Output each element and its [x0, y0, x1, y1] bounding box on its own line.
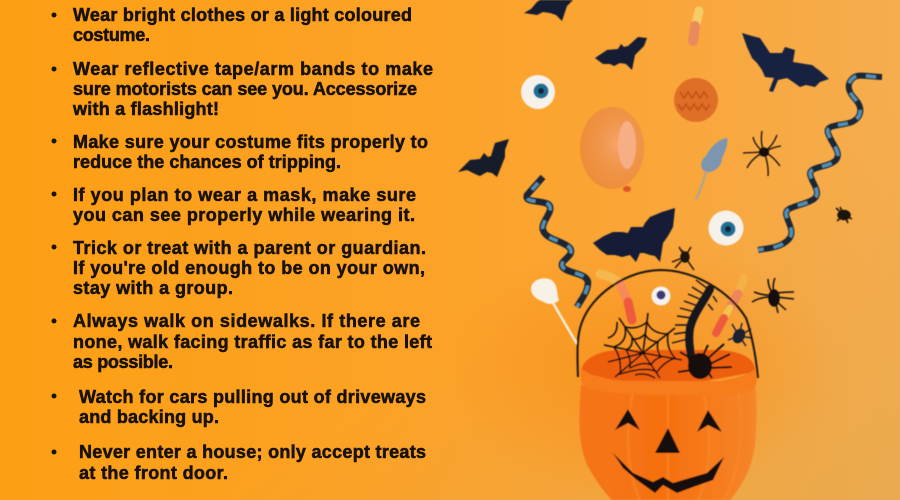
spider: far right: [836, 207, 852, 223]
eyeball: lower right: [708, 210, 744, 246]
bat: top: [524, 0, 573, 21]
tip: mask: [52, 185, 416, 225]
tip: reflective tape: [52, 59, 433, 119]
spider: above basket: [672, 247, 694, 270]
tip: parent or guardian: stay with a group.: [73, 278, 233, 298]
gummy worm: right: [716, 278, 744, 333]
bucket body: [579, 385, 756, 500]
tip: costume fit: reduce the chances of tripping.: [73, 152, 341, 172]
gummy worm: top: [693, 11, 699, 41]
tip: sidewalks: [52, 311, 432, 372]
tip: reflective tape: Wear reflective tape/arm bands to make: [73, 59, 433, 79]
safety tips list: [52, 5, 433, 483]
tip: sidewalks: as possible.: [73, 352, 173, 372]
bucket inner rim: [581, 350, 755, 382]
tip: mask: If you plan to wear a mask, make sure: [73, 185, 416, 205]
spider: on basket handle: [728, 323, 752, 346]
ribbon: right: [758, 76, 882, 250]
bat: left: [458, 139, 509, 177]
halloween flat-lay illustration: [458, 0, 882, 500]
pumpkin bucket: [577, 270, 758, 500]
bucket handle: [577, 270, 758, 378]
tip: parent or guardian: Trick or treat with a parent or guardian.: [73, 238, 426, 258]
bat: lower centre: [593, 208, 675, 262]
tip: bright clothes: costume.: [73, 25, 150, 45]
tip: parent or guardian: If you're old enough to be on your own,: [73, 258, 425, 278]
tip: front door: Never enter a house; only accept treats: [79, 442, 426, 462]
bat: upper centre: [595, 37, 647, 70]
jack-o-lantern mouth: [613, 453, 724, 493]
tip: bright clothes: [52, 5, 412, 45]
bat: large right: [742, 33, 829, 92]
eyeball: upper left: [521, 75, 555, 109]
tip: driveways: Watch for cars pulling out of driveways: [79, 387, 426, 407]
balloon: [580, 107, 644, 192]
spider: right of basket: [752, 278, 794, 313]
gummy worm: left: [600, 274, 632, 320]
spider: centre right: [743, 131, 781, 176]
toy mouse: [696, 138, 727, 200]
ribbon: left: [527, 177, 588, 307]
tip: reflective tape: sure motorists can see you. Accessorize: [73, 79, 417, 99]
bucket ribs: [628, 392, 741, 500]
tip: mask: you can see properly while wearing it.: [73, 205, 415, 225]
tip: reflective tape: with a flashlight!: [72, 99, 219, 119]
tip: costume fit: Make sure your costume fits properly to: [73, 132, 428, 152]
tip: sidewalks: none, walk facing traffic as far to the left: [73, 332, 432, 352]
tip: driveways: [52, 387, 426, 427]
tip: front door: at the front door.: [79, 463, 228, 483]
large spider in bucket: [678, 344, 732, 378]
tip: sidewalks: Always walk on sidewalks. If there are: [73, 311, 420, 331]
tip: bright clothes: Wear bright clothes or a light coloured: [73, 5, 412, 25]
tip: parent or guardian: [52, 238, 426, 298]
tip: costume fit: [52, 132, 428, 172]
jack-o-lantern left eye: [615, 409, 640, 430]
lollipop: skull: [531, 278, 577, 344]
honeycomb pom-pom: [674, 78, 718, 122]
jack-o-lantern nose: [655, 428, 680, 453]
tip: front door: [52, 442, 426, 483]
jack-o-lantern right eye: [697, 410, 722, 432]
bucket rim: [580, 368, 757, 395]
cobweb: [604, 313, 682, 378]
centipede: [672, 280, 717, 368]
tip: driveways: and backing up.: [79, 407, 219, 427]
eyeball: small: [652, 286, 670, 306]
